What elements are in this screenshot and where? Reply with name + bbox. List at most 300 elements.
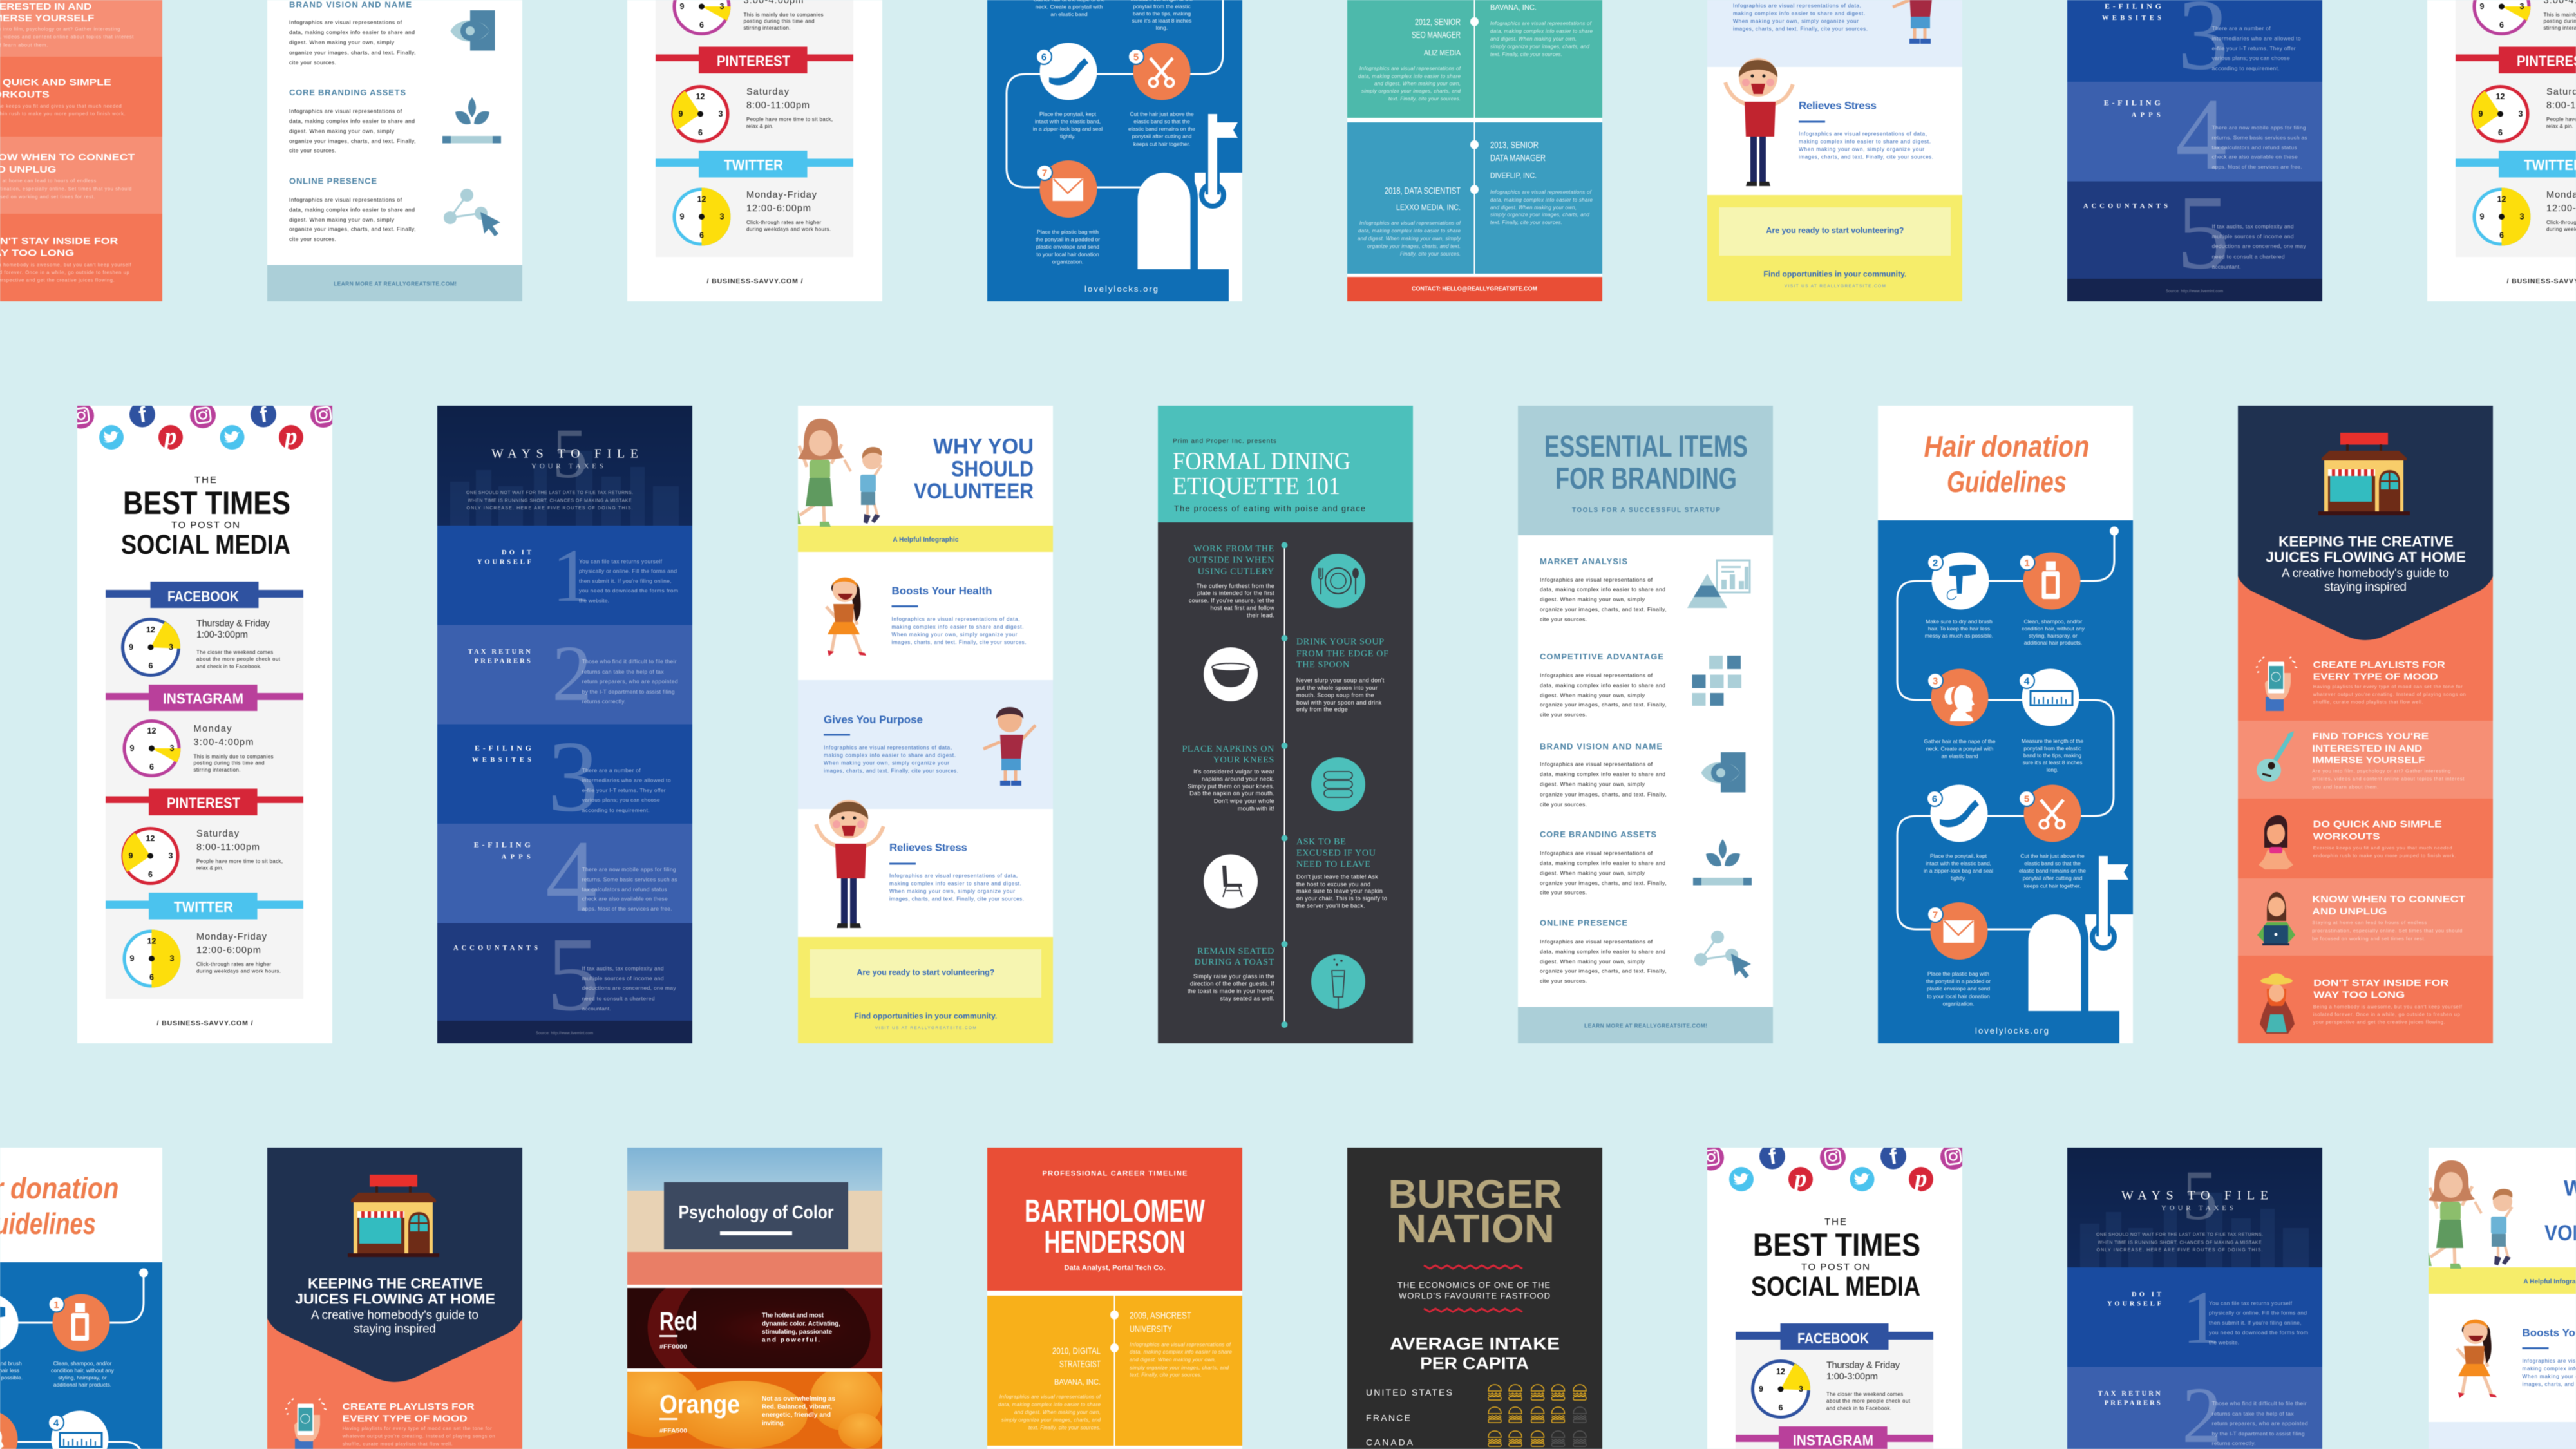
pictogram: united states <box>1366 1385 1586 1400</box>
section: relieves stress: When making your own, simply organize your <box>889 889 1015 895</box>
entry: data manager: Infographics are visual representations of <box>1490 189 1592 195</box>
section: facebook: 12 <box>146 625 155 634</box>
step 7: envelope: to your local hair donation <box>1927 993 1990 999</box>
row 5: accountants: 5 <box>547 915 600 1033</box>
footer: / BUSINESS-SAVVY.COM / <box>157 1019 253 1027</box>
panel repeat: creative juices, bottom row <box>267 1147 523 1449</box>
section: core branding assets: organize your images, charts, and text. Finally, <box>1540 880 1667 886</box>
step 6: bagged ponytail: in a zipper-lock bag and seal <box>1924 867 1993 874</box>
tip 4 <box>1296 837 1387 909</box>
step 5: scissors: keeps cut hair together. <box>2024 882 2081 889</box>
step 4: ruler: sure it's at least 8 inches <box>2023 759 2082 766</box>
section: facebook: FACEBOOK <box>167 588 239 605</box>
row 5 <box>2260 974 2463 1034</box>
step 1: shampoo <box>2020 553 2085 646</box>
tip 3: It's considered vulgar to wear <box>1193 768 1274 775</box>
entry: seo manager: simply organize your images, charts, and <box>1361 88 1461 94</box>
section: red <box>627 1288 882 1368</box>
icon: soup bowl <box>1204 647 1258 701</box>
row 1: do it yourself: then submit it. If you're filing online, <box>579 578 671 584</box>
section: red: and powerful. <box>762 1337 820 1344</box>
tip 5: DURING A TOAST <box>1195 958 1274 967</box>
title <box>2266 534 2466 594</box>
tip 5: stay seated as well. <box>1220 995 1274 1001</box>
entry: data manager: DIVEFLIP, INC. <box>1490 171 1537 180</box>
illustration: boy in maroon <box>983 707 1036 786</box>
section: online presence: data, making complex info easier to share and <box>1540 948 1665 954</box>
section: pinterest: PINTEREST <box>167 795 240 811</box>
step 6: bagged ponytail: 6 <box>1932 793 1937 805</box>
row 4 <box>2257 892 2465 945</box>
step 1: shampoo: styling, hairspray, or <box>2029 632 2078 639</box>
section: pinterest <box>106 788 303 884</box>
entry: ashcrest university: and digest. When making your own, <box>1130 1357 1216 1363</box>
section: instagram: stirring interaction. <box>193 767 241 773</box>
step 5: scissors <box>2019 784 2086 889</box>
row 3: e-filing websites: various plans; you can choose <box>582 797 660 803</box>
row 3: e-filing websites: WEBSITES <box>472 757 531 764</box>
step 6: bagged ponytail: Place the ponytail, kept <box>1930 853 1987 859</box>
entry: seo manager: text. Finally, cite your sources. <box>1388 96 1461 102</box>
row 2: tax return preparers: by the I-T department to assist filing <box>582 688 675 695</box>
header text: ONE SHOULD NOT WAIT FOR THE LAST DATE TO FILE TAX RETURNS. <box>466 491 633 495</box>
section: orange: Not as overwhelming as <box>762 1396 835 1403</box>
title: staying inspired <box>2324 581 2407 594</box>
connector path <box>1897 531 2114 929</box>
title: BEST TIMES <box>123 485 290 521</box>
section: pinterest: Saturday <box>196 829 240 839</box>
section: pinterest: 3 <box>169 851 173 860</box>
row 5: accountants: ACCOUNTANTS <box>453 945 538 952</box>
title: BURGER <box>1388 1173 1562 1217</box>
section: core branding assets: Infographics are visual representations of <box>1540 850 1653 857</box>
mailbox <box>2029 856 2133 1043</box>
entry: data scientist: Infographics are visual representations of <box>1359 220 1461 226</box>
entry: bavana right: text. Finally, cite your sources. <box>1490 52 1562 57</box>
section: market analysis: organize your images, charts, and text. Finally, <box>1540 606 1667 612</box>
row 3: e-filing websites: according to requirement. <box>582 807 650 813</box>
section: instagram: posting during this time and <box>193 760 264 766</box>
entry: seo manager: Infographics are visual representations of <box>1359 66 1461 71</box>
subtitle band: A Helpful Infographic <box>893 536 959 544</box>
step 6: bagged ponytail: intact with the elastic band, <box>1926 860 1991 867</box>
header text: 5 <box>553 414 587 493</box>
entry: seo manager: data, making complex info easier to share <box>1358 73 1461 79</box>
section: core branding assets: data, making complex info easier to share and <box>1540 860 1665 866</box>
entry: bavana right: data, making complex info easier to share <box>1490 28 1593 34</box>
step 7: envelope: plastic envelope and send <box>1927 985 1990 992</box>
tip 2: bowl with your spoon and drink <box>1296 699 1382 706</box>
row 5: DON'T STAY INSIDE FOR <box>2313 978 2448 989</box>
footer url: lovelylocks.org <box>1975 1026 2049 1036</box>
step 7: envelope: organization. <box>1943 1001 1974 1007</box>
entry: data scientist: 2018, DATA SCIENTIST <box>1385 185 1461 196</box>
section: instagram <box>106 685 303 775</box>
row 5: accountants: multiple sources of income and <box>582 975 664 981</box>
navy header shape <box>2238 406 2493 640</box>
section: instagram: INSTAGRAM <box>163 690 243 707</box>
chart heading: AVERAGE INTAKE <box>1390 1334 1560 1354</box>
header: ETIQUETTE 101 <box>1173 473 1340 500</box>
title <box>1388 1173 1562 1251</box>
section: boosts your health: When making your own, simply organize your <box>891 632 1018 638</box>
tip 1: WORK FROM THE <box>1193 544 1274 554</box>
tip 3: Dab the napkin on your mouth. <box>1189 790 1274 797</box>
section: orange: #FFA500 <box>659 1428 687 1434</box>
pictogram: france: FRANCE <box>1366 1413 1410 1423</box>
section: market analysis: cite your sources. <box>1540 616 1587 622</box>
header text: WAYS TO FILE <box>491 447 638 461</box>
step 5: scissors: elastic band so that the <box>2024 860 2081 867</box>
header: BARTHOLOMEW <box>1025 1194 1206 1229</box>
section: core branding assets: cite your sources. <box>1540 889 1587 896</box>
section: red: dynamic color. Activating, <box>762 1320 840 1327</box>
title card: Psychology of Color <box>679 1202 833 1223</box>
timeline <box>1282 542 1288 1028</box>
step 4: ruler: band to the tips, making <box>2023 752 2081 759</box>
row 4: be focused on working and set times for rest. <box>2312 936 2425 942</box>
tip 1: their lead. <box>1247 612 1274 618</box>
section: core branding assets <box>1540 829 1752 896</box>
row 1: whatever output you're creating. Instead of playing songs on <box>2313 691 2466 697</box>
row 1: Having playlists for every type of mood can set the tone for <box>2313 683 2463 689</box>
step 4: ruler: ponytail from the elastic <box>2023 745 2081 752</box>
panel: 5 ways to file your taxes <box>437 406 692 1043</box>
entry: digital strategist: data, making complex info easier to share <box>998 1402 1101 1408</box>
tip 2: THE SPOON <box>1296 660 1350 670</box>
section: core branding assets: digest. When making your own, simply <box>1540 869 1645 876</box>
tip 5: direction of the other guests. If <box>1190 981 1274 987</box>
header text: YOUR TAXES <box>531 462 603 470</box>
row 1: do it yourself <box>477 533 678 618</box>
section: market analysis <box>1540 556 1750 622</box>
row 3: e-filing websites: intermediaries who are allowed to <box>582 777 671 783</box>
row 5: accountants: If tax audits, tax complexity and <box>582 965 664 971</box>
step 1: shampoo: condition hair, without any <box>2022 625 2085 632</box>
row 3: WORKOUTS <box>2313 831 2380 842</box>
grey content card <box>106 589 303 999</box>
section: online presence: ONLINE PRESENCE <box>1540 918 1627 927</box>
tip 2: mouth. Scoop soup from the <box>1296 692 1374 698</box>
title: SOCIAL MEDIA <box>121 529 290 560</box>
section: twitter: TWITTER <box>174 898 233 915</box>
section: instagram: 12 <box>147 726 156 735</box>
entry: ashcrest university: text. Finally, cite your sources. <box>1130 1372 1202 1378</box>
entry: digital strategist: 2010, DIGITAL <box>1052 1346 1101 1357</box>
panel repeat: hair donation, top row <box>987 0 1243 302</box>
entry: ashcrest university: Infographics are visual representations of <box>1130 1342 1231 1348</box>
row 5: WAY TOO LONG <box>2313 989 2405 1000</box>
icon: champagne glass <box>1311 954 1365 1009</box>
panel: formal dining etiquette <box>1158 406 1413 1043</box>
section: instagram: This is mainly due to companies <box>193 753 273 760</box>
social icon row <box>68 402 336 450</box>
section: pinterest: People have more time to sit back, <box>196 858 283 864</box>
row 2: tax return preparers: returns can take the help of tax <box>582 668 664 675</box>
row 2: tax return preparers <box>468 629 678 717</box>
step 2: dryer: 2 <box>1933 558 1938 569</box>
section: gives you purpose: Gives You Purpose <box>824 714 923 726</box>
row 2: tax return preparers: Those who find it difficult to file their <box>582 658 677 665</box>
section: gives you purpose <box>824 707 1036 786</box>
section: gives you purpose: images, charts, and text. Finally, cite your sources. <box>824 768 958 774</box>
section: twitter: 9 <box>130 954 135 963</box>
panel repeat: social media, top row <box>627 0 882 301</box>
section: red: #FF0000 <box>659 1343 687 1350</box>
entry: seo manager: SEO MANAGER <box>1412 30 1461 41</box>
title <box>121 475 290 560</box>
header: Prim and Proper Inc. presents <box>1173 438 1276 445</box>
pictogram: france <box>1366 1407 1586 1423</box>
section: facebook: and check in to Facebook. <box>196 663 261 670</box>
tip 3: YOUR KNEES <box>1213 755 1274 765</box>
row 1: shuffle, curate mood playlists that flow well. <box>2313 699 2423 705</box>
section: twitter: 6 <box>149 972 154 981</box>
section: pinterest: 6 <box>148 870 153 879</box>
panel: keeping the creative juices flowing <box>2238 406 2493 1043</box>
panel repeat: taxes, bottom row <box>2067 1147 2323 1449</box>
section: market analysis: MARKET ANALYSIS <box>1540 556 1627 566</box>
icon: woman with hat <box>2260 974 2295 1034</box>
step 3: ponytail: neck. Create a ponytail with <box>1926 746 1993 752</box>
entry: data scientist: LEXXO MEDIA, INC. <box>1396 203 1461 212</box>
step 5: scissors: ponytail after cutting and <box>2023 875 2083 881</box>
section: market analysis: Infographics are visual representations of <box>1540 576 1653 583</box>
pictogram: united states: UNITED STATES <box>1366 1387 1452 1397</box>
step 3: ponytail: 3 <box>1933 676 1938 687</box>
icon: eye <box>1701 752 1745 792</box>
step 5: scissors: elastic band remains on the <box>2019 867 2086 874</box>
row 3: e-filing websites: E-FILING <box>475 743 531 752</box>
tip 2: put the whole spoon into your <box>1296 685 1378 691</box>
tip 3: Simply put them on your knees. <box>1188 783 1274 790</box>
tip 2: FROM THE EDGE OF <box>1296 649 1389 659</box>
row 5: accountants: deductions are concerned, one may <box>582 985 676 991</box>
call to action <box>854 968 997 1030</box>
subtitle with zigzags <box>1397 1265 1550 1312</box>
row 4: e-filing apps: There are now mobile apps for filing <box>582 866 676 873</box>
pictogram: canada: CANADA <box>1366 1437 1414 1448</box>
section: red: stimulating, passionate <box>762 1329 832 1336</box>
panel repeat: volunteer, bottom row <box>2428 1148 2576 1449</box>
tip 3: Don't wipe your whole <box>1214 798 1274 804</box>
row 3 <box>2259 815 2456 869</box>
title card <box>664 1182 848 1249</box>
entry: data manager: simply organize your images, charts, and <box>1490 212 1590 218</box>
row 2 <box>2257 731 2465 790</box>
section: pinterest: 8:00-11:00pm <box>196 842 260 853</box>
section: twitter: during weekdays and work hours. <box>196 969 281 974</box>
row 4: e-filing apps: returns. Some basic services such as <box>582 876 677 882</box>
section: facebook: 9 <box>129 643 133 652</box>
panel: why you should volunteer <box>798 406 1053 1043</box>
section: orange: energetic, friendly and <box>762 1412 831 1419</box>
title: A creative homebody's guide to <box>2282 567 2449 580</box>
section: competitive advantage <box>1540 652 1741 718</box>
step 4: ruler: long. <box>2047 766 2058 773</box>
section: relieves stress: Infographics are visual representations of data, <box>889 873 1018 878</box>
call to action: Find opportunities in your community. <box>854 1011 997 1020</box>
section: orange <box>607 1367 882 1449</box>
timeline spine <box>1110 1296 1119 1449</box>
section: gives you purpose: making complex info easier to share and digest. <box>824 752 956 759</box>
panel repeat: creative juices, top row <box>0 0 163 302</box>
tip 4: the host to excuse you and <box>1296 881 1370 887</box>
step 3: ponytail: Gather hair at the nape of the <box>1924 738 1996 744</box>
row 2: articles, videos and content online about topics that interest <box>2312 776 2465 782</box>
row 5: Being a homebody is awesome, but you can't keep yourself <box>2313 1003 2463 1010</box>
section: pinterest: 12 <box>146 834 155 843</box>
panel: burger nation <box>1347 1148 1602 1449</box>
timeline spine <box>1470 0 1479 274</box>
section: twitter: Monday-Friday <box>196 932 267 942</box>
panel repeat: volunteer, top row <box>1707 0 1963 302</box>
step 6: bagged ponytail <box>1924 784 1993 881</box>
contact footer: CONTACT: HELLO@REALLYGREATSITE.COM <box>1412 286 1537 293</box>
title <box>1924 430 2089 498</box>
icon: chair <box>1204 854 1258 908</box>
title: THE <box>194 475 216 486</box>
row 3: Exercise keeps you fit and gives you that much needed <box>2313 845 2452 851</box>
row 5: accountants <box>453 915 676 1033</box>
section: brand vision and name: cite your sources. <box>1540 801 1587 808</box>
title: WHY YOU <box>933 434 1034 459</box>
entry: data manager: DATA MANAGER <box>1490 153 1546 164</box>
panel repeat: social media, bottom row <box>1707 1147 1963 1449</box>
step 1: shampoo: additional hair products. <box>2024 639 2082 646</box>
header: Data Analyst, Portal Tech Co. <box>1064 1264 1166 1272</box>
entry: data scientist <box>1358 185 1461 257</box>
tip 3: PLACE NAPKINS ON <box>1182 744 1274 754</box>
row 1: do it yourself: you need to download the forms from <box>579 587 678 594</box>
illustration: cheering boy <box>816 800 884 928</box>
section: twitter: 3 <box>170 954 175 963</box>
panel: essential items for branding <box>1518 406 1773 1043</box>
title: FOR BRANDING <box>1555 461 1737 495</box>
row 4: e-filing apps: 4 <box>545 819 597 933</box>
section: brand vision and name: Infographics are visual representations of <box>1540 761 1653 768</box>
section: twitter: 12:00-6:00pm <box>196 945 261 956</box>
row 3: DO QUICK AND SIMPLE <box>2313 819 2442 830</box>
tip 4: ASK TO BE <box>1296 837 1346 847</box>
row 4: KNOW WHEN TO CONNECT <box>2312 894 2465 905</box>
section: twitter <box>106 893 303 988</box>
step 4: ruler: Measure the length of the <box>2022 737 2083 744</box>
row 2: tax return preparers: TAX RETURN <box>468 649 531 656</box>
tip 4: NEED TO LEAVE <box>1296 860 1371 869</box>
section: boosts your health: Infographics are visual representations of data, <box>891 616 1020 622</box>
entry: digital strategist: STRATEGIST <box>1059 1359 1101 1370</box>
call to action: VISIT US AT REALLYGREATSITE.COM <box>875 1026 976 1030</box>
section: online presence: digest. When making your own, simply <box>1540 958 1645 965</box>
entry: data scientist: data, making complex info easier to share <box>1358 228 1461 234</box>
tip 1: USING CUTLERY <box>1198 567 1274 577</box>
row 3: e-filing websites: There are a number of <box>582 767 641 773</box>
row 4: AND UNPLUG <box>2312 906 2387 917</box>
subtitle with zigzags: WORLD'S FAVOURITE FASTFOOD <box>1399 1291 1550 1301</box>
call to action: Are you ready to start volunteering? <box>857 968 994 977</box>
entry: bavana right: simply organize your images, charts, and <box>1490 44 1590 50</box>
panel repeat: taxes, top row <box>2067 0 2323 302</box>
tip 1 <box>1188 544 1274 618</box>
entry: seo manager: 2012, SENIOR <box>1415 17 1461 28</box>
section: brand vision and name <box>1540 742 1745 808</box>
header text: WHEN TIME IS RUNNING SHORT, CHANCES OF MAKING A MISTAKE <box>468 498 632 504</box>
entry: digital strategist: simply organize your images, charts, and <box>1001 1417 1101 1423</box>
illustration: girl in orange <box>826 578 866 656</box>
section: facebook <box>106 582 303 675</box>
panel repeat: hair donation, bottom row <box>0 1148 163 1449</box>
title <box>1544 429 1748 514</box>
row 1: do it yourself: the website. <box>579 598 609 604</box>
step 7: envelope: the ponytail in a padded or <box>1926 978 1991 985</box>
section: facebook: Thursday & Friday <box>196 618 270 629</box>
panel repeat: branding, top row <box>267 0 523 301</box>
section: red: The hottest and most <box>762 1312 824 1320</box>
section: boosts your health: images, charts, and text. Finally, cite your sources. <box>891 639 1027 645</box>
step 6: bagged ponytail: tightly. <box>1951 875 1966 881</box>
title: Guidelines <box>1947 465 2067 498</box>
section: competitive advantage: data, making complex info easier to share and <box>1540 682 1665 688</box>
section: instagram: 9 <box>130 744 135 753</box>
entry: ashcrest university: 2009, ASHCREST <box>1130 1311 1191 1321</box>
step 1: shampoo: Clean, shampoo, and/or <box>2024 618 2083 625</box>
tip 5: REMAIN SEATED <box>1197 947 1274 956</box>
tip 1: course. If you're unsure, let the <box>1189 598 1274 604</box>
subtitle with zigzags: THE ECONOMICS OF ONE OF THE <box>1397 1280 1550 1290</box>
row 1: CREATE PLAYLISTS FOR <box>2313 659 2445 670</box>
row 4: e-filing apps: tax calculators and refund status <box>582 886 667 893</box>
row 1: do it yourself: physically or online. Fill the forms and <box>579 567 677 574</box>
section: boosts your health: making complex info easier to share and digest. <box>891 624 1024 630</box>
entry: data scientist: organize your images, charts, and text. <box>1367 243 1461 249</box>
panel: best times to post on social media <box>68 402 336 1043</box>
tip 4: on your chair. This is to signify to <box>1296 895 1387 902</box>
illustration: mother and son <box>798 419 882 527</box>
step 5: scissors: 5 <box>2024 793 2029 805</box>
section: boosts your health: Boosts Your Health <box>891 585 992 597</box>
section: orange: inviting. <box>762 1420 785 1427</box>
section: competitive advantage: Infographics are visual representations of <box>1540 672 1653 679</box>
step 7: envelope: 7 <box>1933 909 1938 921</box>
section: twitter: Click-through rates are higher <box>196 961 271 967</box>
section: facebook: 6 <box>149 661 153 670</box>
header text <box>466 414 638 511</box>
step 4: ruler <box>2019 668 2083 773</box>
tip 4: make sure to leave your napkin <box>1296 888 1383 895</box>
row 2: tax return preparers: returns correctly. <box>582 698 626 705</box>
panel: professional career timeline, upper part <box>987 1148 1242 1449</box>
tip 2: Never slurp your soup and don't <box>1296 677 1385 684</box>
section: brand vision and name: digest. When making your own, simply <box>1540 781 1645 787</box>
tip 3: napkins around your neck. <box>1202 775 1274 782</box>
entry: digital strategist <box>998 1346 1101 1431</box>
panel: professional career timeline, lower part <box>1347 0 1602 301</box>
row 1: EVERY TYPE OF MOOD <box>2313 672 2438 683</box>
header: HENDERSON <box>1045 1225 1185 1260</box>
chart heading: PER CAPITA <box>1420 1354 1529 1373</box>
title: JUICES FLOWING AT HOME <box>2266 549 2466 565</box>
row 3: e-filing websites: 3 <box>547 721 599 833</box>
row 4: e-filing apps: APPS <box>502 854 531 861</box>
icon: storefront <box>2318 433 2410 515</box>
row 3: e-filing websites: e-file your I-T returns. They offer <box>582 787 666 793</box>
step 7: envelope <box>1926 902 1991 1007</box>
step 5: scissors: Cut the hair just above the <box>2020 853 2085 859</box>
entry: digital strategist: text. Finally, cite your sources. <box>1028 1425 1101 1431</box>
tip 4: EXCUSED IF YOU <box>1296 848 1376 858</box>
header <box>1173 438 1365 513</box>
